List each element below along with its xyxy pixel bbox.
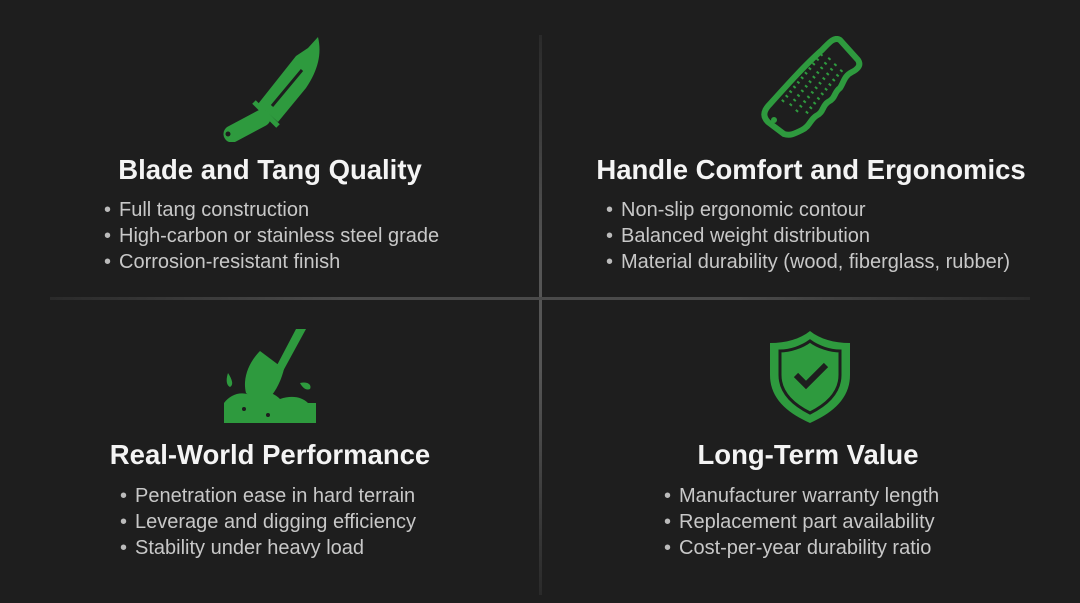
bullet list: Balanced weight distribution (621, 225, 870, 247)
bullet list: Full tang construction (119, 199, 309, 221)
bullet list (606, 199, 1010, 273)
bullet list (664, 485, 939, 559)
bullet list (104, 199, 439, 273)
bullet list: Material durability (wood, fiberglass, rubber) (621, 251, 1010, 273)
panel: long-term value (664, 331, 939, 559)
heading: Blade and Tang Quality (118, 154, 422, 185)
icon: knife (224, 37, 320, 142)
bullet list: Manufacturer warranty length (679, 485, 939, 507)
panel: real-world performance (110, 329, 430, 559)
bullet list: Replacement part availability (679, 511, 935, 533)
heading: Handle Comfort and Ergonomics (596, 154, 1026, 185)
heading: Long-Term Value (697, 439, 919, 470)
icon: handle (761, 36, 862, 138)
bullet list: Leverage and digging efficiency (135, 511, 416, 533)
bullet list: Corrosion-resistant finish (119, 251, 340, 273)
bullet list: Penetration ease in hard terrain (135, 485, 415, 507)
panel: blade and tang quality (104, 37, 439, 273)
icon: shield check (770, 331, 850, 423)
bullet list: Stability under heavy load (135, 537, 364, 559)
bullet list: Non-slip ergonomic contour (621, 199, 866, 221)
panel: handle comfort (596, 36, 1026, 273)
icon: shovel in dirt (224, 329, 316, 423)
heading: Real-World Performance (110, 439, 430, 470)
bullet list: High-carbon or stainless steel grade (119, 225, 439, 247)
bullet list: Cost-per-year durability ratio (679, 537, 931, 559)
bullet list (120, 485, 416, 559)
